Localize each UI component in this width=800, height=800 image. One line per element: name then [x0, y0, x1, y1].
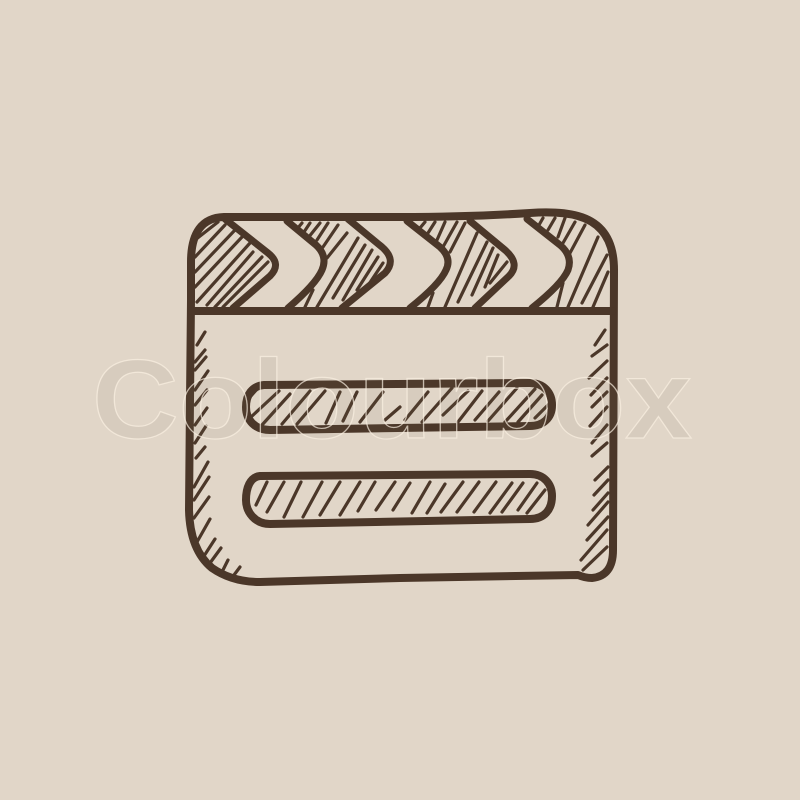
board divider [192, 307, 612, 315]
lower slot [246, 474, 552, 524]
clapper stripe hatching [195, 218, 608, 307]
board outline [189, 212, 614, 582]
upper slot [246, 383, 552, 430]
watermark: Colourbox [92, 337, 692, 462]
lower slot hatching [256, 482, 545, 517]
upper slot outline [246, 383, 552, 430]
icon: clapperboard [189, 212, 614, 582]
upper slot hatching [250, 388, 548, 425]
lower slot outline [246, 474, 552, 524]
side hatching [194, 330, 608, 575]
clapper chevrons [225, 219, 569, 308]
